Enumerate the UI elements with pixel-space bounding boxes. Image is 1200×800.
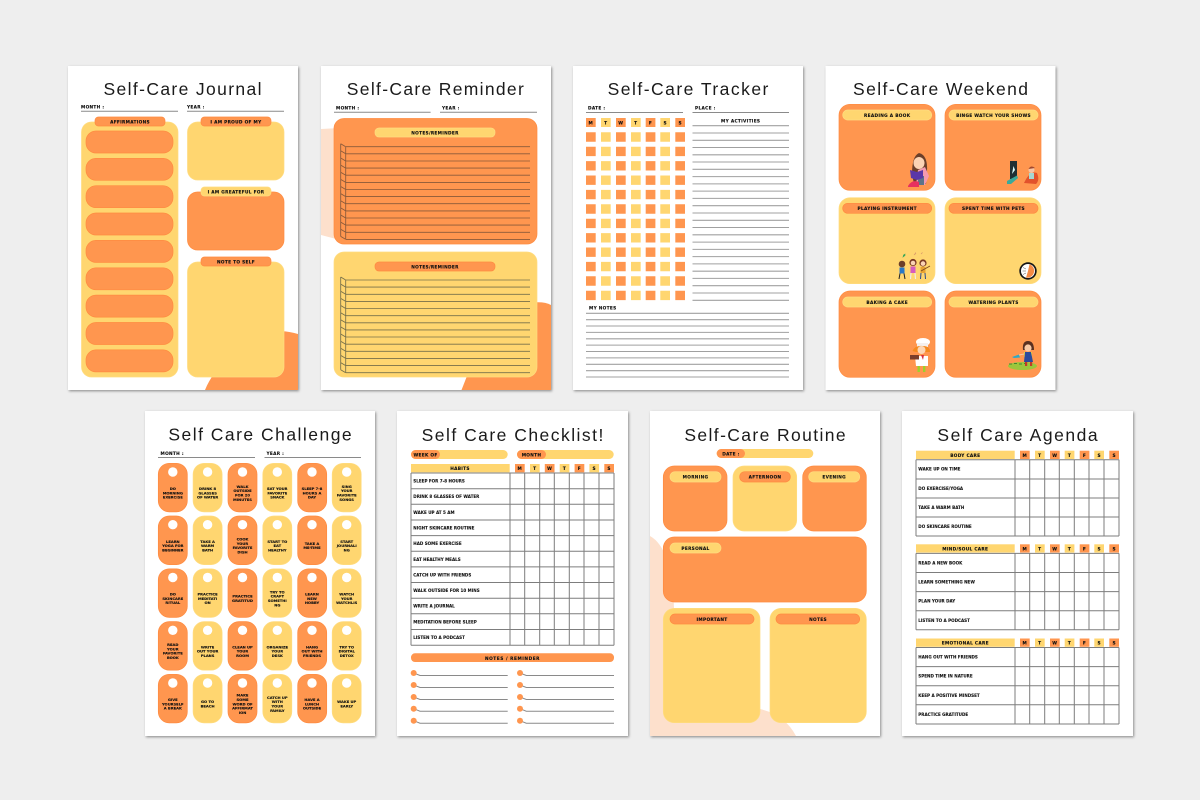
- icon: clock: [1019, 262, 1037, 280]
- challenge tags grid: WRITE: [201, 645, 215, 649]
- year field: YEAR :: [186, 104, 205, 110]
- challenge tags grid: HOBBY: [305, 601, 319, 605]
- year field: [440, 106, 537, 112]
- challenge tags grid: BOOK: [167, 656, 179, 660]
- challenge tags grid: OUT WITH: [302, 650, 322, 654]
- month field: [517, 450, 614, 459]
- challenge tags grid: WORD OF: [232, 702, 253, 706]
- habits table: EAT HEALTHY MEALS: [413, 557, 461, 562]
- section: body care: S: [1112, 453, 1116, 459]
- section: emotional care: HANG OUT WITH FRIENDS: [918, 655, 978, 660]
- title: Self-Care Routine: [684, 425, 846, 445]
- panel: morning: MORNING: [683, 475, 709, 481]
- challenge tags grid: SOMETHI: [268, 599, 287, 603]
- habits table: LISTEN TO A PODCAST: [413, 635, 465, 640]
- challenge tags grid: DIGITAL: [339, 650, 355, 654]
- section: mind/soul care: S: [1112, 546, 1116, 552]
- week of field: WEEK OF: [413, 452, 438, 458]
- challenge tags grid: ON: [204, 601, 211, 605]
- challenge tags grid: GIVE: [168, 698, 178, 702]
- panel: I am proud of my: [188, 117, 284, 180]
- date field: DATE :: [588, 105, 605, 111]
- title: Self-Care Journal: [104, 79, 262, 99]
- habits table: WALK OUTSIDE FOR 10 MINS: [413, 588, 480, 593]
- challenge tags grid: YOGA FOR: [161, 544, 184, 548]
- page: Self-Care Journal: [68, 66, 298, 390]
- challenge tags grid: MAKE: [237, 694, 249, 698]
- section: emotional care: T: [1068, 641, 1071, 647]
- challenge tags grid: READ: [167, 643, 178, 647]
- challenge tags grid: TAKE A: [305, 542, 319, 546]
- challenge tags grid: OUTSIDE: [303, 707, 322, 711]
- section: mind/soul care: LISTEN TO A PODCAST: [918, 618, 970, 623]
- challenge tags grid: OUT YOUR: [197, 650, 218, 654]
- challenge tags grid: START TO: [267, 540, 287, 544]
- habits table: DRINK 8 GLASSES OF WATER: [413, 494, 480, 499]
- challenge tags grid: SLEEP 7-8: [302, 487, 323, 491]
- challenge tags grid: PRACTICE: [232, 595, 253, 599]
- challenge tags grid: EAT YOUR: [267, 487, 288, 491]
- my notes list: [586, 306, 789, 377]
- challenge tags grid: NG: [344, 548, 350, 552]
- section: body care: F: [1083, 453, 1086, 459]
- challenge tags grid: GRATITUD: [232, 599, 253, 603]
- panel: afternoon: AFTERNOON: [749, 475, 781, 481]
- challenge tags grid: NG: [274, 603, 280, 607]
- challenge tags grid: [158, 463, 361, 723]
- challenge tags grid: TRY TO: [339, 645, 354, 649]
- page: Self Care Agenda: [902, 411, 1133, 736]
- panel: playing instrument: [839, 198, 935, 284]
- challenge tags grid: WARM: [201, 544, 215, 548]
- panel: reading a book: [839, 104, 935, 190]
- page: Self-Care Weekend: [826, 66, 1056, 390]
- challenge tags grid: FRIENDS: [303, 654, 321, 658]
- my activities list: [692, 118, 789, 300]
- challenge tags grid: YOUR: [271, 704, 283, 708]
- challenge tags grid: CATCH UP: [267, 696, 288, 700]
- habits table: CATCH UP WITH FRIENDS: [413, 572, 471, 578]
- section: mind/soul care: [916, 544, 1119, 630]
- challenge tags grid: MORNING: [163, 491, 183, 495]
- section: mind/soul care: T: [1068, 546, 1071, 552]
- page: Self-Care Routine: [650, 411, 880, 736]
- month field: MONTH :: [81, 104, 104, 110]
- panel: important: [663, 608, 760, 723]
- month field: [81, 104, 178, 111]
- section: body care: WAKE UP ON TIME: [918, 467, 961, 472]
- decorative orange blob: [205, 331, 298, 390]
- challenge tags grid: TAKE A: [200, 540, 215, 544]
- section: body care: W: [1052, 453, 1057, 459]
- section: mind/soul care: MIND/SOUL CARE: [942, 546, 988, 552]
- habits table: WRITE A JOURNAL: [413, 604, 455, 609]
- challenge tags grid: START: [340, 540, 354, 544]
- month field: MONTH: [522, 452, 541, 458]
- challenge tags grid: PRACTICE: [197, 592, 218, 596]
- title: Self Care Challenge: [168, 425, 352, 445]
- panel: spent time with pets: [945, 198, 1041, 284]
- challenge tags grid: RITUAL: [165, 601, 181, 605]
- challenge tags grid: HOURS A: [303, 491, 322, 495]
- section: body care: BODY CARE: [950, 453, 980, 459]
- notes reminder bar: [411, 653, 614, 662]
- year field: YEAR :: [266, 451, 284, 457]
- day headers: S: [678, 120, 682, 126]
- month field: MONTH :: [160, 451, 184, 457]
- challenge tags grid: DETOX: [340, 654, 354, 658]
- habits table: MEDITATION BEFORE SLEEP: [413, 619, 477, 624]
- challenge tags grid: LEARN: [305, 592, 319, 596]
- challenge tags grid: WATCH: [339, 592, 354, 596]
- month field: [334, 106, 431, 112]
- weekday headers: [515, 464, 614, 472]
- challenge tags grid: ORGANIZE: [267, 645, 289, 649]
- page: Self Care Challenge: [145, 411, 375, 736]
- challenge tags grid: COOK: [237, 538, 249, 542]
- section: emotional care: KEEP A POSITIVE MINDSET: [918, 693, 980, 698]
- section: mind/soul care: S: [1097, 546, 1101, 552]
- notes reminder bar: NOTES / REMINDER: [485, 656, 540, 662]
- weekday headers: M: [518, 466, 522, 472]
- challenge tags grid: FAVORITE: [233, 546, 253, 550]
- challenge tags grid: DESK: [272, 654, 283, 658]
- section: emotional care: M: [1023, 641, 1027, 647]
- habits table: HAD SOME EXERCISE: [413, 541, 462, 546]
- habits table: SLEEP FOR 7-8 HOURS: [413, 479, 465, 484]
- page: Self-Care Tracker: [573, 66, 803, 390]
- challenge tags grid: BATH: [202, 548, 213, 552]
- challenge tags grid: YOUR: [236, 542, 248, 546]
- section: emotional care: EMOTIONAL CARE: [942, 641, 989, 647]
- weekday headers: T: [533, 466, 536, 472]
- year field: [186, 104, 284, 111]
- challenge tags grid: BEACH: [201, 704, 215, 708]
- panel: morning: [663, 466, 727, 531]
- challenge tags grid: ME-TIME: [303, 546, 321, 550]
- section: body care: [916, 451, 1119, 536]
- section: body care: M: [1023, 453, 1027, 459]
- habits table: [411, 473, 614, 645]
- page: Self Care Checklist: [397, 411, 628, 736]
- panel: watering plants: WATERING PLANTS: [968, 300, 1019, 306]
- challenge tags grid: ION: [239, 711, 246, 715]
- challenge tags grid: DAY: [308, 496, 316, 500]
- challenge tags grid: LEARN: [166, 540, 180, 544]
- panel: evening: [803, 466, 866, 531]
- decorative peach blob: [321, 128, 340, 240]
- section: emotional care: F: [1083, 641, 1086, 647]
- section: body care: S: [1097, 453, 1101, 459]
- challenge tags grid: WATCHLIS: [336, 601, 358, 605]
- challenge tags grid: YOUR: [271, 650, 283, 654]
- challenge tags grid: OUTSIDE: [233, 489, 252, 493]
- challenge tags grid: YOURSELF: [161, 702, 184, 706]
- panel: notes reminder orange: NOTES/REMINDER: [411, 131, 459, 137]
- challenge tags grid: YOUR: [340, 597, 353, 601]
- challenge tags grid: HANG: [306, 645, 318, 649]
- notes bullet lines: [411, 670, 614, 724]
- habit tracker grid: [586, 132, 685, 300]
- habits table: NIGHT SKINCARE ROUTINE: [413, 526, 475, 530]
- section: mind/soul care: M: [1023, 546, 1027, 552]
- section: emotional care: T: [1038, 641, 1041, 647]
- panel: notes: NOTES: [809, 617, 827, 623]
- challenge tags grid: ROOM: [236, 654, 249, 658]
- section: body care: TAKE A WARM BATH: [918, 505, 965, 510]
- year field: [264, 451, 361, 458]
- section: emotional care: S: [1112, 641, 1116, 647]
- date field: DATE :: [722, 452, 740, 458]
- place field: [692, 105, 789, 112]
- panel: binge watch your shows: BINGE WATCH YOUR SHOWS: [956, 113, 1031, 119]
- panel: afternoon: [733, 466, 797, 531]
- panel: baking a cake: BAKING A CAKE: [866, 300, 908, 306]
- title: Self-Care Weekend: [853, 79, 1028, 99]
- panel: notes reminder yellow: NOTES/REMINDER: [411, 265, 459, 271]
- panel: I am grateful for: [188, 187, 284, 250]
- icon: TV and child on beanbag: [1007, 161, 1038, 184]
- challenge tags grid: WAKE UP: [337, 700, 357, 704]
- panel: baking a cake: [839, 291, 935, 377]
- title: Self Care Agenda: [937, 425, 1098, 445]
- section: mind/soul care: F: [1083, 546, 1086, 552]
- title: Self-Care Reminder: [347, 79, 524, 99]
- challenge tags grid: DISH: [237, 550, 248, 554]
- challenge tags grid: OF WATER: [197, 496, 218, 500]
- place field: PLACE :: [695, 105, 716, 111]
- section: emotional care: S: [1097, 641, 1101, 647]
- icon: children playing music: [899, 252, 930, 279]
- section: mind/soul care: W: [1052, 546, 1057, 552]
- challenge tags grid: HAVE A: [304, 698, 320, 702]
- challenge tags grid: SOME: [237, 698, 249, 702]
- panel: notes reminder yellow: [334, 252, 537, 377]
- section: body care: DO SKINCARE ROUTINE: [918, 524, 972, 529]
- challenge tags grid: CRAFT: [271, 595, 284, 599]
- challenge tags grid: GO TO: [201, 700, 214, 704]
- section: emotional care: SPEND TIME IN NATURE: [918, 674, 973, 679]
- challenge tags grid: HEALTHY: [268, 548, 287, 552]
- challenge tags grid: DO: [170, 487, 176, 491]
- challenge tags grid: A BREAK: [164, 707, 182, 711]
- decorative orange blob: [462, 302, 551, 390]
- panel: playing instrument: PLAYING INSTRUMENT: [858, 206, 917, 212]
- challenge tags grid: YOUR: [236, 650, 248, 654]
- challenge tags grid: SONGS: [339, 498, 354, 502]
- challenge tags grid: WITH: [272, 700, 283, 704]
- habits header: [411, 464, 510, 472]
- section: mind/soul care: T: [1038, 546, 1041, 552]
- challenge tags grid: SNACK: [270, 496, 285, 500]
- panel: evening: EVENING: [822, 475, 846, 481]
- panel: spent time with pets: SPENT TIME WITH PETS: [962, 206, 1025, 212]
- challenge tags grid: EARLY: [340, 704, 353, 708]
- weekday headers: S: [592, 466, 596, 472]
- decorative peach blob: [650, 536, 796, 736]
- weekday headers: W: [547, 466, 552, 472]
- day headers: T: [634, 120, 637, 126]
- section: body care: T: [1068, 453, 1071, 459]
- challenge tags grid: NEW: [307, 597, 317, 601]
- challenge tags grid: DRINK 8: [199, 487, 217, 491]
- my notes list: MY NOTES: [589, 306, 616, 312]
- challenge tags grid: MEDITATI: [198, 597, 218, 601]
- panel: personal: [663, 537, 866, 602]
- section: mind/soul care: READ A NEW BOOK: [918, 560, 963, 566]
- challenge tags grid: YOUR: [340, 489, 353, 493]
- title: Self-Care Tracker: [608, 79, 769, 99]
- panel: reading a book: READING A BOOK: [864, 113, 911, 119]
- challenge tags grid: FAVORITE: [337, 493, 357, 497]
- challenge tags grid: LUNCH: [305, 702, 319, 706]
- panel: binge watch your shows: [945, 104, 1041, 190]
- panel: I am grateful for: I AM GREATEFUL FOR: [208, 190, 265, 196]
- section: mind/soul care: LEARN SOMETHING NEW: [918, 580, 975, 585]
- challenge tags grid: TRY TO: [270, 590, 285, 594]
- challenge tags grid: DO: [170, 592, 176, 596]
- panel: important: IMPORTANT: [697, 617, 727, 623]
- panel: watering plants: [945, 291, 1041, 377]
- panel: notes: [770, 608, 866, 723]
- weekday headers: S: [607, 466, 611, 472]
- challenge tags grid: EXERCISE: [163, 496, 183, 500]
- month field: MONTH :: [336, 106, 359, 112]
- icon: chef with cake: [910, 338, 930, 372]
- my activities list: MY ACTIVITIES: [721, 118, 760, 124]
- panel: affirmations: AFFIRMATIONS: [110, 120, 150, 126]
- panel: I am proud of my: I AM PROUD OF MY: [210, 120, 262, 126]
- challenge tags grid: FAMILY: [270, 709, 285, 713]
- challenge tags grid: GLASSES: [198, 491, 217, 495]
- challenge tags grid: FAVORITE: [267, 491, 288, 495]
- panel: personal: PERSONAL: [681, 546, 710, 552]
- panel: affirmations: [82, 117, 178, 377]
- year field: YEAR :: [441, 106, 460, 112]
- habits table: WAKE UP AT 5 AM: [413, 510, 455, 515]
- challenge tags grid: MINUTES: [233, 498, 252, 502]
- weekday headers: F: [578, 466, 581, 472]
- section: emotional care: PRACTICE GRATITUDE: [918, 712, 968, 717]
- date field: [717, 449, 813, 458]
- day headers: M: [589, 120, 593, 126]
- challenge tags grid: SKINCARE: [162, 597, 184, 601]
- section: emotional care: [916, 638, 1119, 724]
- challenge tags grid: YOUR: [166, 647, 179, 651]
- habits header: HABITS: [450, 466, 470, 472]
- challenge tags grid: FOR 20: [235, 493, 250, 497]
- challenge tags grid: WALK: [237, 485, 249, 489]
- day headers: F: [649, 120, 652, 126]
- panel: note to self: [188, 257, 284, 377]
- challenge tags grid: CLEAN UP: [232, 645, 253, 649]
- panel: note to self: NOTE TO SELF: [217, 260, 255, 266]
- challenge tags grid: FAVORITE: [163, 652, 183, 656]
- challenge tags grid: SING: [342, 485, 352, 489]
- date field: [586, 105, 683, 112]
- title: Self Care Checklist!: [422, 425, 603, 445]
- challenge tags grid: JOURNALI: [336, 544, 357, 548]
- day headers: S: [663, 120, 667, 126]
- section: body care: DO EXERCISE/YOGA: [918, 486, 964, 491]
- day headers: W: [618, 120, 623, 126]
- icon: girl reading: [908, 153, 929, 187]
- day headers: [586, 118, 685, 127]
- challenge tags grid: AFFIRMAT: [232, 707, 253, 711]
- panel: notes reminder orange: [334, 118, 537, 244]
- icon: girl watering plants: [1008, 341, 1037, 370]
- page: Self-Care Reminder: [321, 66, 551, 390]
- section: mind/soul care: PLAN YOUR DAY: [918, 599, 955, 604]
- challenge tags grid: BEGINNER: [162, 548, 184, 552]
- day headers: T: [604, 120, 607, 126]
- section: body care: T: [1038, 453, 1041, 459]
- section: emotional care: W: [1052, 641, 1057, 647]
- week of field: [411, 450, 508, 459]
- challenge tags grid: EAT: [273, 544, 282, 548]
- month field: [158, 451, 255, 458]
- challenge tags grid: PLANS: [201, 654, 215, 658]
- weekday headers: T: [563, 466, 566, 472]
